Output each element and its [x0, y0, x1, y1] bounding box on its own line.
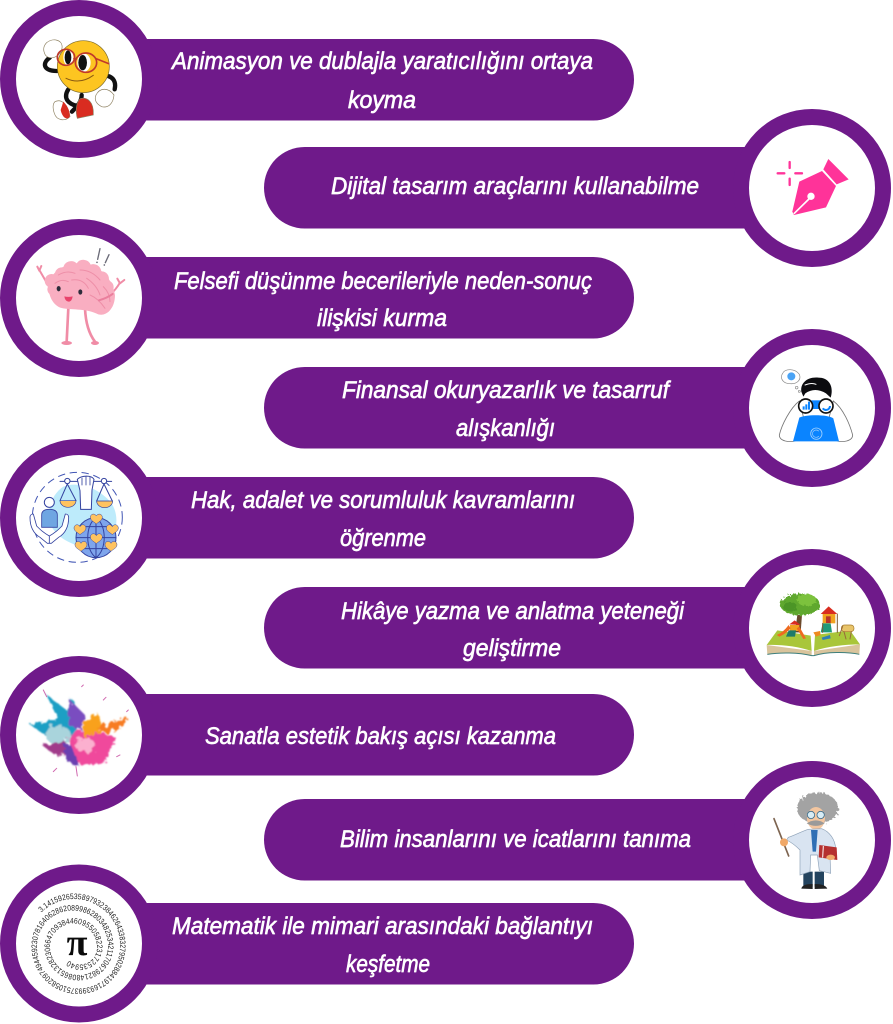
circle ring	[741, 557, 883, 699]
panel: row 6 storytelling	[264, 557, 883, 699]
label text: Matematik ile mimari arasındaki bağlantıyı	[172, 913, 593, 940]
label text	[174, 268, 592, 332]
label text: Finansal okuryazarlık ve tasarruf	[342, 377, 671, 404]
label text: Animasyon ve dublajla yaratıcılığını ortaya	[170, 48, 593, 75]
icon: colour powder explosion	[30, 685, 128, 776]
label text	[341, 598, 685, 662]
label text: alışkanlığı	[456, 415, 555, 442]
bar	[264, 799, 812, 880]
bar	[264, 587, 812, 668]
circle ring	[741, 337, 883, 479]
panel: row 7 art	[8, 664, 634, 806]
label text	[172, 913, 593, 978]
circle ring	[8, 227, 150, 369]
icon: smiley cartoon character	[44, 40, 115, 120]
label text: Dijital tasarım araçlarını kullanabilme	[331, 173, 699, 200]
label text	[191, 487, 575, 552]
panel: row 4 financial literacy	[264, 337, 883, 479]
circle ring	[8, 664, 150, 806]
icon: open book with playground	[767, 593, 860, 656]
label text: Felsefi düşünme becerileriyle neden-sonuç	[174, 268, 592, 295]
label text: ilişkisi kurma	[317, 305, 447, 332]
circle ring	[741, 117, 883, 259]
label text: Sanatla estetik bakış açısı kazanma	[205, 723, 556, 750]
label text: öğrenme	[340, 525, 426, 552]
panel: row 3 philosophy	[8, 227, 634, 369]
bar	[264, 367, 812, 448]
label text: Bilim insanlarını ve icatlarını tanıma	[340, 826, 691, 853]
icon: pen nib with sparkle	[778, 159, 849, 215]
panel: row 5 rights and justice	[8, 447, 634, 589]
icon: happy brain	[37, 249, 124, 345]
bar	[79, 477, 634, 558]
circle ring	[741, 769, 883, 911]
label text: koyma	[348, 87, 416, 114]
label text: Hak, adalet ve sorumluluk kavramlarını	[191, 487, 575, 514]
bar	[79, 39, 634, 120]
label text: keşfetme	[346, 951, 430, 978]
bar	[79, 694, 634, 776]
bar	[79, 257, 634, 338]
panel: row 8 science	[264, 769, 883, 911]
label text	[342, 377, 671, 442]
icon: pi digit spiral: π	[67, 922, 88, 964]
bar	[79, 903, 634, 984]
icon: person with binoculars	[779, 370, 853, 442]
panel: row 2 digital design	[264, 117, 883, 259]
label text: Hikâye yazma ve anlatma yeteneği	[341, 598, 685, 625]
circle ring	[8, 447, 150, 589]
icon: scientist with pointer	[774, 793, 838, 889]
panel: row 1 animation	[8, 8, 634, 150]
circle ring	[8, 8, 150, 150]
panel: row 9 mathematics	[0, 864, 634, 1022]
icon: justice scale, people and globe	[30, 472, 122, 562]
label text: geliştirme	[463, 635, 561, 662]
icon: pi digit spiral: 3.14159265358979323846264338327950288419716939937510582097494459230781640628620899862803482534211706798214808651328230664709384460955058223172535940	[31, 894, 126, 994]
bar	[264, 147, 812, 228]
circle ring	[8, 872, 150, 1014]
label text	[170, 48, 593, 114]
